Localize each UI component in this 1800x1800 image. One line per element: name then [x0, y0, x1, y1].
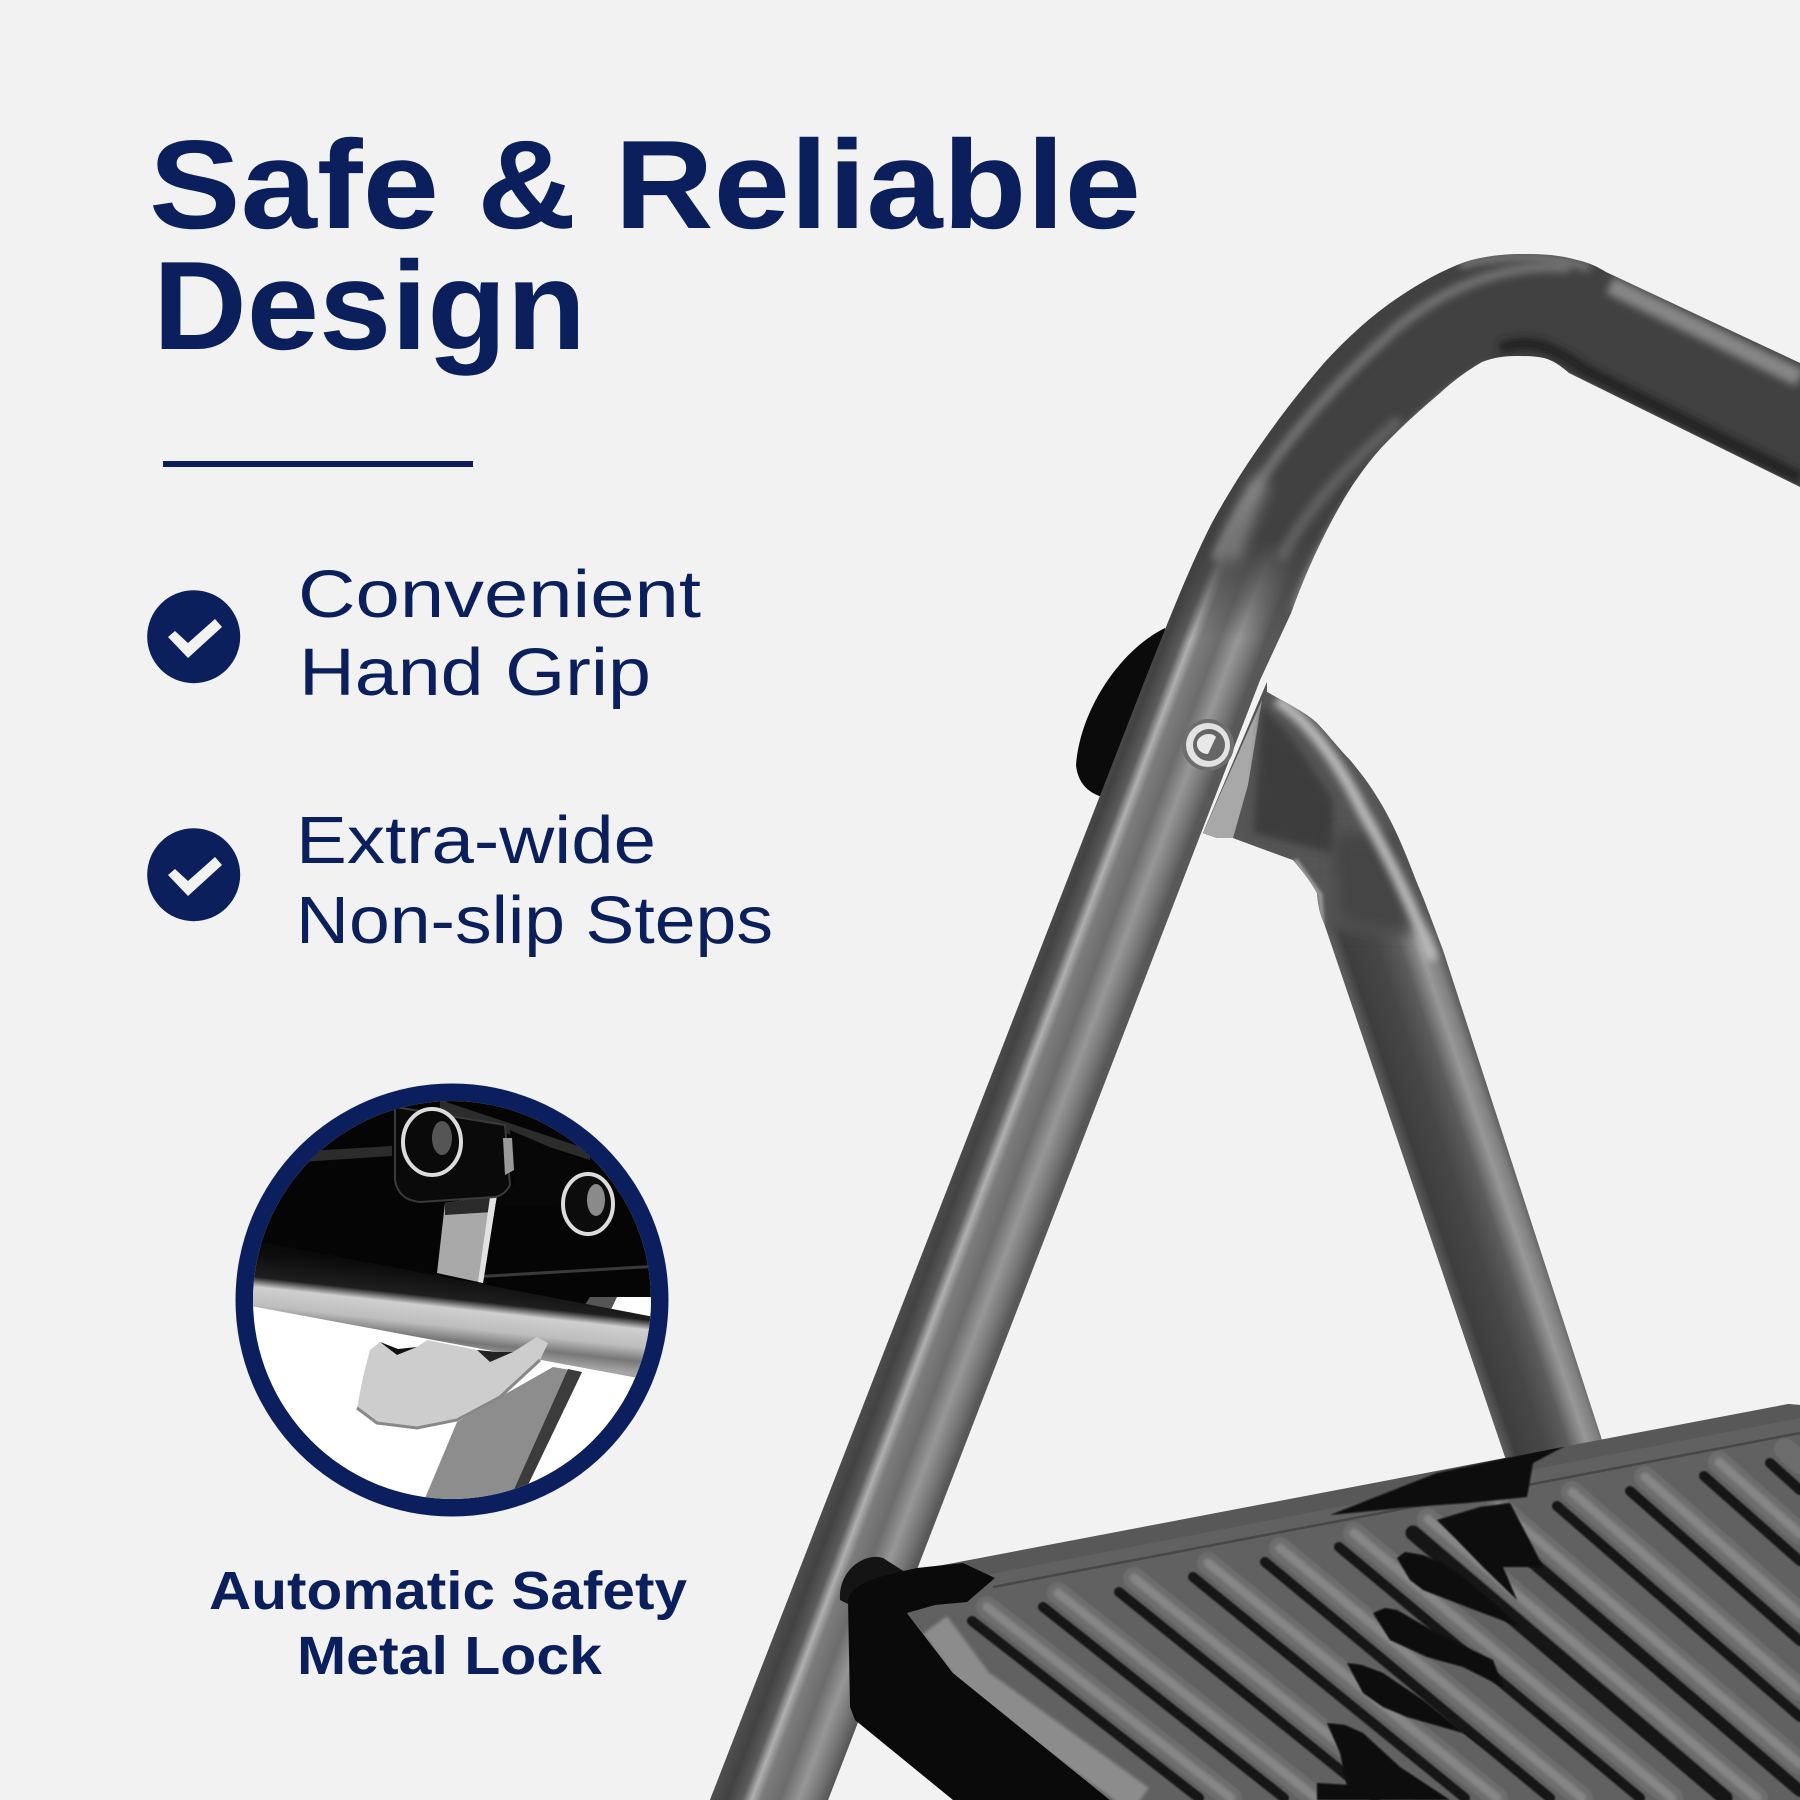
caption: Metal Lock: [297, 1626, 603, 1686]
corner black band: [848, 1563, 995, 1650]
knob corner behind step: [840, 1557, 905, 1610]
step: [840, 1390, 1800, 1800]
step ladder photo: [600, 200, 1800, 1800]
strap: [437, 1195, 497, 1283]
feature text: Non-slip Steps: [296, 883, 773, 958]
rib grooves: [972, 1463, 1800, 1798]
feature text: [298, 557, 701, 710]
title: Safe & Reliable: [149, 114, 1141, 255]
icon: check badge: [147, 590, 240, 683]
feature text: Extra-wide: [296, 803, 656, 878]
feature: extra-wide non-slip steps: [147, 803, 773, 958]
icon: check badge: [147, 828, 240, 921]
title: Design: [153, 235, 586, 376]
rivets: [403, 1109, 461, 1175]
caption: [209, 1561, 687, 1686]
latch hook: [357, 1337, 548, 1428]
lower arm: [423, 1367, 582, 1503]
circular inset: metal lock: [236, 1084, 670, 1516]
step front face: [848, 1585, 1110, 1800]
feature: convenient hand grip: [147, 557, 701, 710]
black reflections on tread: [1317, 1445, 1567, 1800]
rib ridges: [987, 1449, 1800, 1798]
feature text: [296, 803, 773, 958]
feature text: Hand Grip: [299, 635, 651, 710]
rivet: [1182, 719, 1234, 771]
caption: Automatic Safety: [209, 1561, 687, 1621]
main tube frame: [710, 254, 1800, 1800]
bracket block: [395, 1107, 510, 1202]
light strip along front edge: [935, 1625, 1140, 1800]
feature text: Convenient: [298, 557, 701, 632]
step tread top with ribs: [880, 1390, 1800, 1800]
crossbar tube: [253, 1242, 650, 1378]
rubber knob behind tube: [1076, 628, 1180, 797]
rear support leg with hinge bracket: [1190, 670, 1620, 1470]
title: [149, 114, 1141, 376]
